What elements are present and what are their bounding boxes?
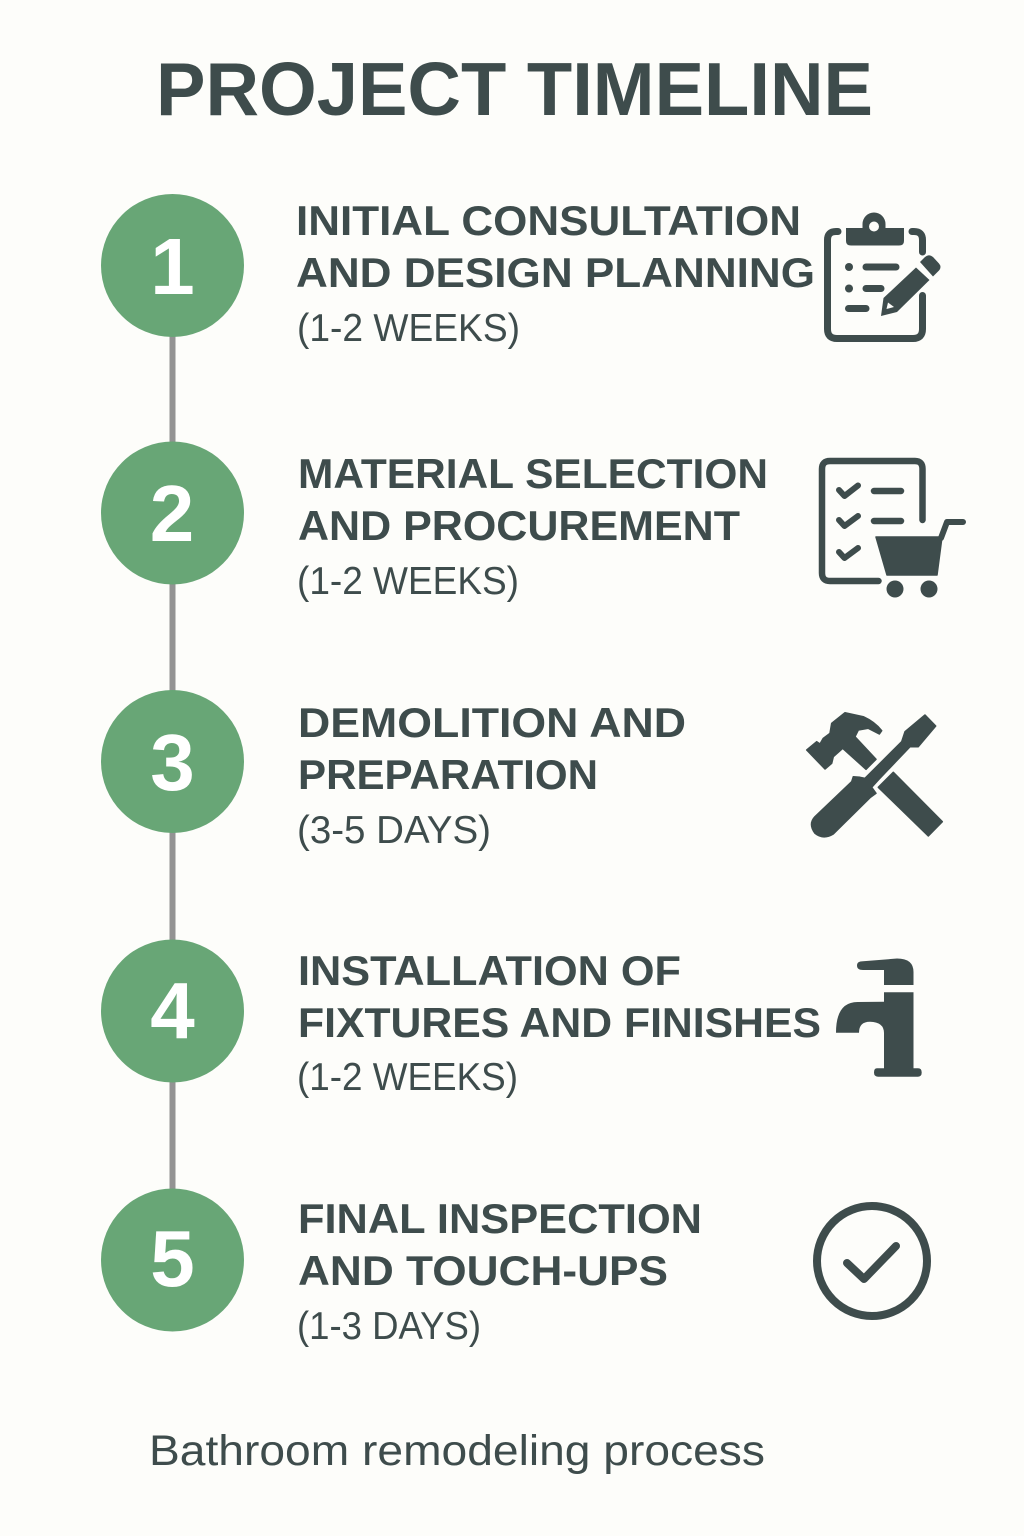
footer caption: Bathroom remodeling process (149, 1427, 765, 1475)
step 1 heading: AND DESIGN PLANNING (296, 249, 815, 296)
step 2 heading: MATERIAL SELECTION (298, 450, 768, 497)
step 4 duration: (1-2 WEEKS) (297, 1056, 518, 1099)
step 5 number badge (101, 1188, 244, 1332)
step 5 (101, 1188, 927, 1348)
step 5 duration: (1-3 DAYS) (297, 1305, 481, 1348)
step 2 heading: AND PROCUREMENT (298, 502, 740, 549)
timeline connector line 4-5 (170, 1076, 176, 1196)
step 1 heading: INITIAL CONSULTATION (296, 197, 801, 244)
timeline connector line 3-4 (170, 826, 176, 946)
step 2 number badge (101, 442, 244, 584)
title: PROJECT TIMELINE (156, 47, 873, 131)
step 5 number badge: 5 (150, 1214, 195, 1303)
step 3 (101, 690, 942, 852)
icon: clipboard with pencil (828, 213, 940, 338)
step 3 duration: (3-5 DAYS) (297, 809, 491, 852)
step 4 heading: FIXTURES AND FINISHES (298, 999, 821, 1046)
step 1 number badge (101, 194, 244, 337)
step 3 heading: DEMOLITION AND (298, 699, 686, 746)
icon: faucet (836, 958, 922, 1077)
step 4 (101, 940, 922, 1099)
step 3 number badge: 3 (150, 718, 195, 807)
icon: crossed hammer and screwdriver (807, 713, 942, 837)
timeline connector line 1-2 (170, 330, 176, 448)
step 1 number badge: 1 (150, 222, 195, 311)
step 4 number badge: 4 (150, 966, 195, 1055)
step 3 heading: PREPARATION (298, 751, 598, 798)
step 3 number badge (101, 690, 244, 833)
step 1 (101, 194, 940, 350)
icon: check mark in circle (817, 1206, 927, 1316)
timeline connector line 2-3 (170, 578, 176, 696)
step 4 number badge (101, 940, 244, 1082)
step 5 heading: FINAL INSPECTION (298, 1195, 702, 1242)
step 2 number badge: 2 (150, 469, 194, 558)
step 4 heading: INSTALLATION OF (298, 947, 681, 994)
step 1 duration: (1-2 WEEKS) (297, 307, 520, 350)
step 2 (101, 442, 963, 603)
step 5 heading: AND TOUCH-UPS (298, 1247, 668, 1294)
icon: checklist with shopping cart (822, 461, 963, 598)
step 2 duration: (1-2 WEEKS) (297, 560, 519, 603)
